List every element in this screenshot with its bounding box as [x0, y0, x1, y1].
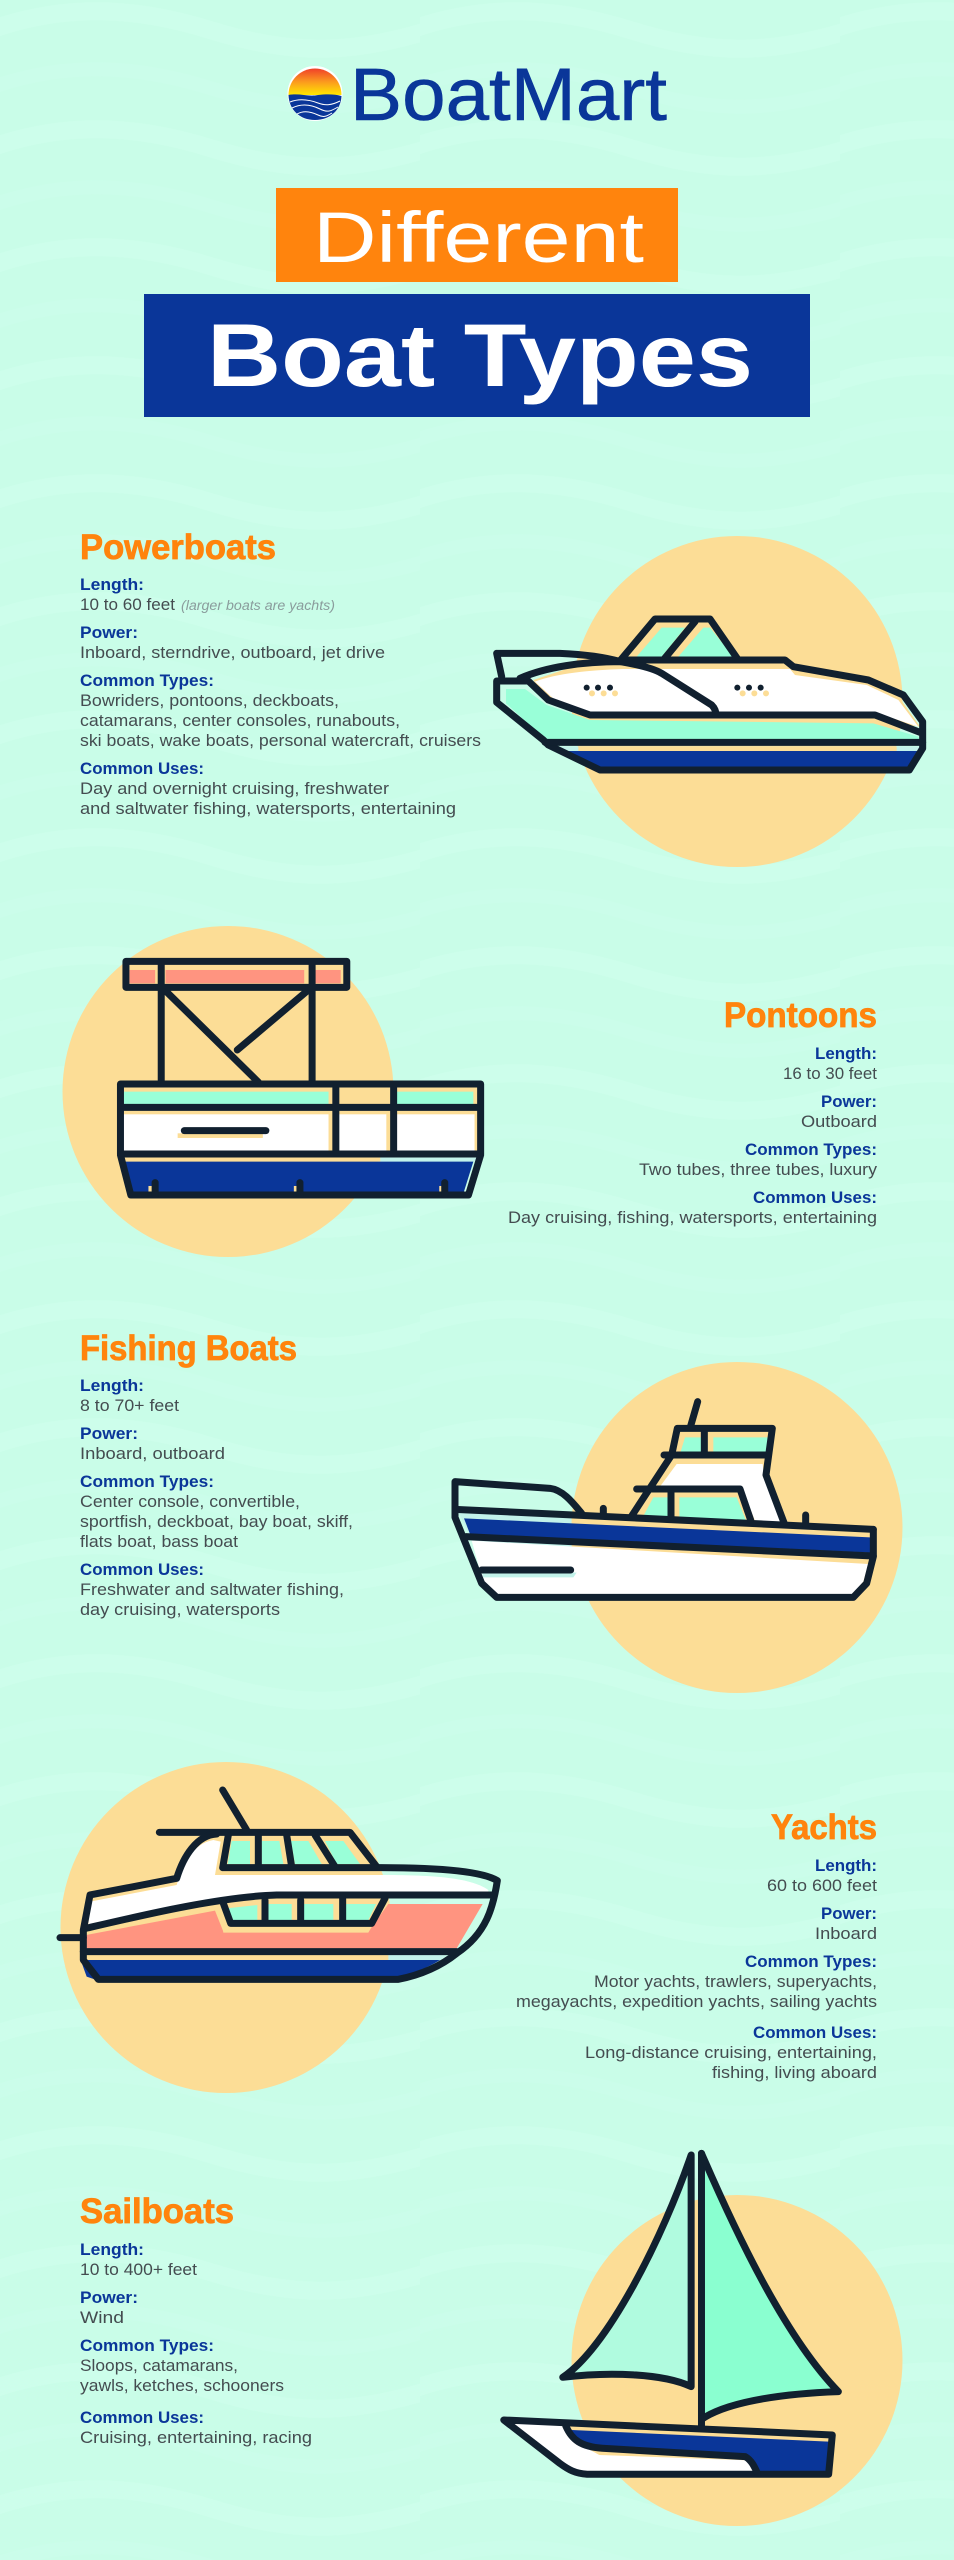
text block: yachts specs: [516, 1857, 877, 2082]
text block: yachts specs: megayachts, expedition yachts, sailing yachts: [516, 1992, 877, 2011]
text block: yachts specs: Inboard: [815, 1924, 877, 1943]
heading: Yachts: [771, 1808, 877, 1847]
text block: fishing boats specs: flats boat, bass boat: [80, 1532, 238, 1551]
text block: pontoons specs: Length:: [815, 1045, 877, 1063]
text block: yachts specs: Long-distance cruising, entertaining,: [585, 2043, 877, 2062]
text block: pontoons specs: Outboard: [801, 1112, 877, 1131]
logo wordmark: BoatMart: [350, 53, 667, 136]
text block: pontoons specs: [508, 1045, 878, 1227]
text block: powerboats specs: Day and overnight cruising, freshwater: [80, 779, 389, 798]
text block: fishing boats specs: 8 to 70+ feet: [80, 1396, 179, 1415]
icon: sailboat: [504, 2153, 838, 2474]
heading: Pontoons: [724, 996, 877, 1035]
text block: pontoons specs: Common Uses:: [753, 1189, 877, 1207]
text block: sailboats specs: 10 to 400+ feet: [80, 2260, 197, 2279]
text block: powerboats specs: ski boats, wake boats, personal watercraft, cruisers: [80, 731, 481, 750]
icon: pontoon boat: [120, 961, 481, 1195]
text block: fishing boats specs: Length:: [80, 1377, 144, 1395]
icon: powerboat: [497, 619, 923, 770]
panel: powerboats: [80, 528, 923, 867]
text block: fishing boats specs: Freshwater and saltwater fishing,: [80, 1580, 344, 1599]
text block: yachts specs: Common Uses:: [753, 2024, 877, 2042]
text block: fishing boats specs: day cruising, watersports: [80, 1600, 280, 1619]
text block: pontoons specs: Power:: [821, 1093, 877, 1111]
text block: yachts specs: fishing, living aboard: [712, 2063, 877, 2082]
backdrop circle: [572, 536, 902, 867]
backdrop circle: [572, 1362, 902, 1693]
panel: sailboats: [80, 2153, 902, 2526]
text block: powerboats specs: Bowriders, pontoons, deckboats,: [80, 691, 339, 710]
text block: sailboats specs: Sloops, catamarans,: [80, 2356, 238, 2375]
text block: sailboats specs: Wind: [80, 2308, 124, 2327]
backdrop circle: [572, 2195, 902, 2526]
text block: pontoons specs: Common Types:: [745, 1141, 877, 1159]
text block: yachts specs: 60 to 600 feet: [767, 1876, 877, 1895]
heading: Sailboats: [80, 2192, 234, 2231]
text block: sailboats specs: Length:: [80, 2241, 144, 2259]
title: [144, 188, 810, 417]
title line: Different: Different: [313, 199, 644, 278]
text block: fishing boats specs: [80, 1377, 353, 1619]
text block: powerboats specs: [80, 576, 481, 818]
text block: sailboats specs: yawls, ketches, schooners: [80, 2376, 284, 2395]
text block: fishing boats specs: Center console, convertible,: [80, 1492, 300, 1511]
text block: powerboats specs: 10 to 60 feet: [80, 595, 175, 614]
logo: BoatMart: [288, 53, 667, 136]
text block: sailboats specs: Power:: [80, 2289, 138, 2307]
text block: powerboats specs: Common Types:: [80, 672, 214, 690]
text block: yachts specs: Length:: [815, 1857, 877, 1875]
text block: sailboats specs: Common Uses:: [80, 2409, 204, 2427]
icon: yacht: [60, 1790, 497, 1981]
heading: Powerboats: [80, 528, 276, 567]
title line: Boat Types: [144, 294, 810, 417]
text block: fishing boats specs: Common Types:: [80, 1473, 214, 1491]
icon: fishing boat: [455, 1402, 873, 1597]
text block: sailboats specs: Cruising, entertaining, racing: [80, 2428, 312, 2447]
backdrop circle: [62, 926, 394, 1257]
text block: fishing boats specs: Power:: [80, 1425, 138, 1443]
text block: fishing boats specs: Common Uses:: [80, 1561, 204, 1579]
heading: Fishing Boats: [80, 1329, 297, 1368]
text block: powerboats specs: (larger boats are yachts): [181, 598, 335, 613]
text block: pontoons specs: Two tubes, three tubes, luxury: [639, 1160, 878, 1179]
title line: Boat Types: Boat Types: [207, 305, 753, 405]
text block: fishing boats specs: Inboard, outboard: [80, 1444, 225, 1463]
text block: powerboats specs: Inboard, sterndrive, outboard, jet drive: [80, 643, 385, 662]
text block: pontoons specs: 16 to 30 feet: [783, 1064, 877, 1083]
text block: fishing boats specs: sportfish, deckboat, bay boat, skiff,: [80, 1512, 353, 1531]
text block: yachts specs: Common Types:: [745, 1953, 877, 1971]
panel: fishing boats: [80, 1329, 902, 1693]
text block: powerboats specs: Power:: [80, 624, 138, 642]
panel: pontoons: [62, 926, 878, 1257]
text block: yachts specs: Power:: [821, 1905, 877, 1923]
text block: sailboats specs: [80, 2241, 312, 2447]
text block: powerboats specs: catamarans, center consoles, runabouts,: [80, 711, 400, 730]
text block: yachts specs: Motor yachts, trawlers, superyachts,: [594, 1972, 877, 1991]
text block: powerboats specs: Length:: [80, 576, 144, 594]
backdrop circle: [60, 1762, 392, 2093]
text block: powerboats specs: and saltwater fishing, watersports, entertaining: [80, 799, 456, 818]
text block: pontoons specs: Day cruising, fishing, watersports, entertaining: [508, 1208, 877, 1227]
icon: sunset over water: [288, 66, 342, 121]
text block: sailboats specs: Common Types:: [80, 2337, 214, 2355]
text block: powerboats specs: Common Uses:: [80, 760, 204, 778]
panel: yachts: [60, 1762, 877, 2093]
title line: Different: [276, 188, 678, 282]
